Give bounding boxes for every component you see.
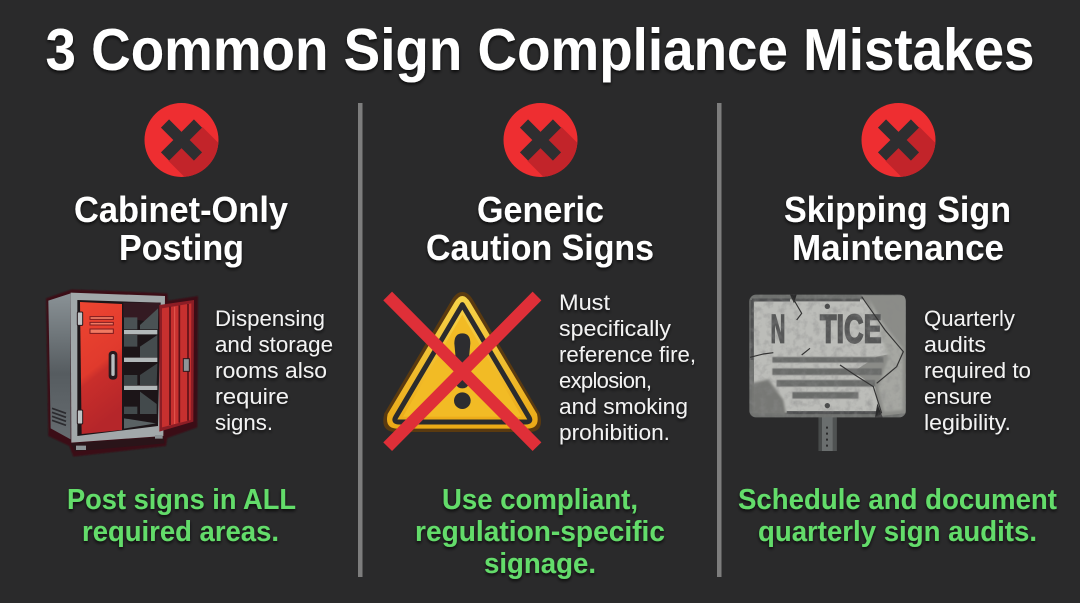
text block: Must bbox=[559, 290, 610, 315]
text block: require bbox=[215, 384, 289, 409]
heading: Cabinet-Only bbox=[74, 189, 288, 230]
callout: fix: required areas. bbox=[82, 516, 279, 548]
icon: open red cabinet bbox=[46, 289, 198, 457]
panel: skipping sign maintenance bbox=[738, 103, 1057, 548]
callout: fix bbox=[67, 484, 296, 548]
heading bbox=[426, 189, 654, 268]
text block: specifically bbox=[559, 316, 671, 341]
text block: Dispensing bbox=[215, 306, 325, 331]
icon: worn notice sign: N bbox=[771, 308, 785, 352]
callout: fix: regulation-specific bbox=[415, 516, 665, 548]
icon: worn notice sign: TICE bbox=[820, 308, 882, 352]
heading bbox=[784, 189, 1011, 268]
text block: and smoking bbox=[559, 394, 688, 419]
callout: fix bbox=[415, 484, 665, 580]
icon: red X badge bbox=[862, 103, 936, 177]
icon: worn notice sign bbox=[749, 295, 906, 451]
heading: Caution Signs bbox=[426, 227, 654, 268]
icon: crossed-out caution triangle bbox=[383, 292, 541, 447]
divider: left bbox=[358, 103, 362, 577]
heading: Posting bbox=[119, 227, 244, 268]
divider: right bbox=[717, 103, 722, 577]
text block: ensure bbox=[924, 384, 992, 409]
icon: red X badge bbox=[504, 103, 578, 177]
panel: cabinet-only posting bbox=[46, 103, 333, 548]
text block: explosion, bbox=[559, 368, 652, 393]
text block: signs. bbox=[215, 410, 273, 435]
text block bbox=[924, 306, 1031, 435]
heading bbox=[74, 189, 288, 268]
text block: required to bbox=[924, 358, 1031, 383]
callout: fix: signage. bbox=[484, 548, 596, 580]
heading: Skipping Sign bbox=[784, 189, 1011, 230]
text block: prohibition. bbox=[559, 420, 670, 445]
text block: and storage bbox=[215, 332, 333, 357]
heading: Maintenance bbox=[792, 227, 1004, 268]
callout: fix: Schedule and document bbox=[738, 484, 1057, 516]
icon: red X badge bbox=[144, 103, 218, 177]
text block: Quarterly bbox=[924, 306, 1015, 331]
text block: audits bbox=[924, 332, 986, 357]
panel: generic caution signs bbox=[383, 103, 696, 580]
text block: legibility. bbox=[924, 410, 1011, 435]
heading: Generic bbox=[477, 189, 604, 230]
callout: fix bbox=[738, 484, 1057, 548]
callout: fix: Post signs in ALL bbox=[67, 484, 296, 516]
title: 3 Common Sign Compliance Mistakes bbox=[46, 17, 1034, 83]
text block bbox=[559, 290, 696, 445]
text block: reference fire, bbox=[559, 342, 696, 367]
text block: rooms also bbox=[215, 358, 327, 383]
callout: fix: Use compliant, bbox=[442, 484, 638, 516]
text block bbox=[215, 306, 333, 435]
callout: fix: quarterly sign audits. bbox=[758, 516, 1037, 548]
